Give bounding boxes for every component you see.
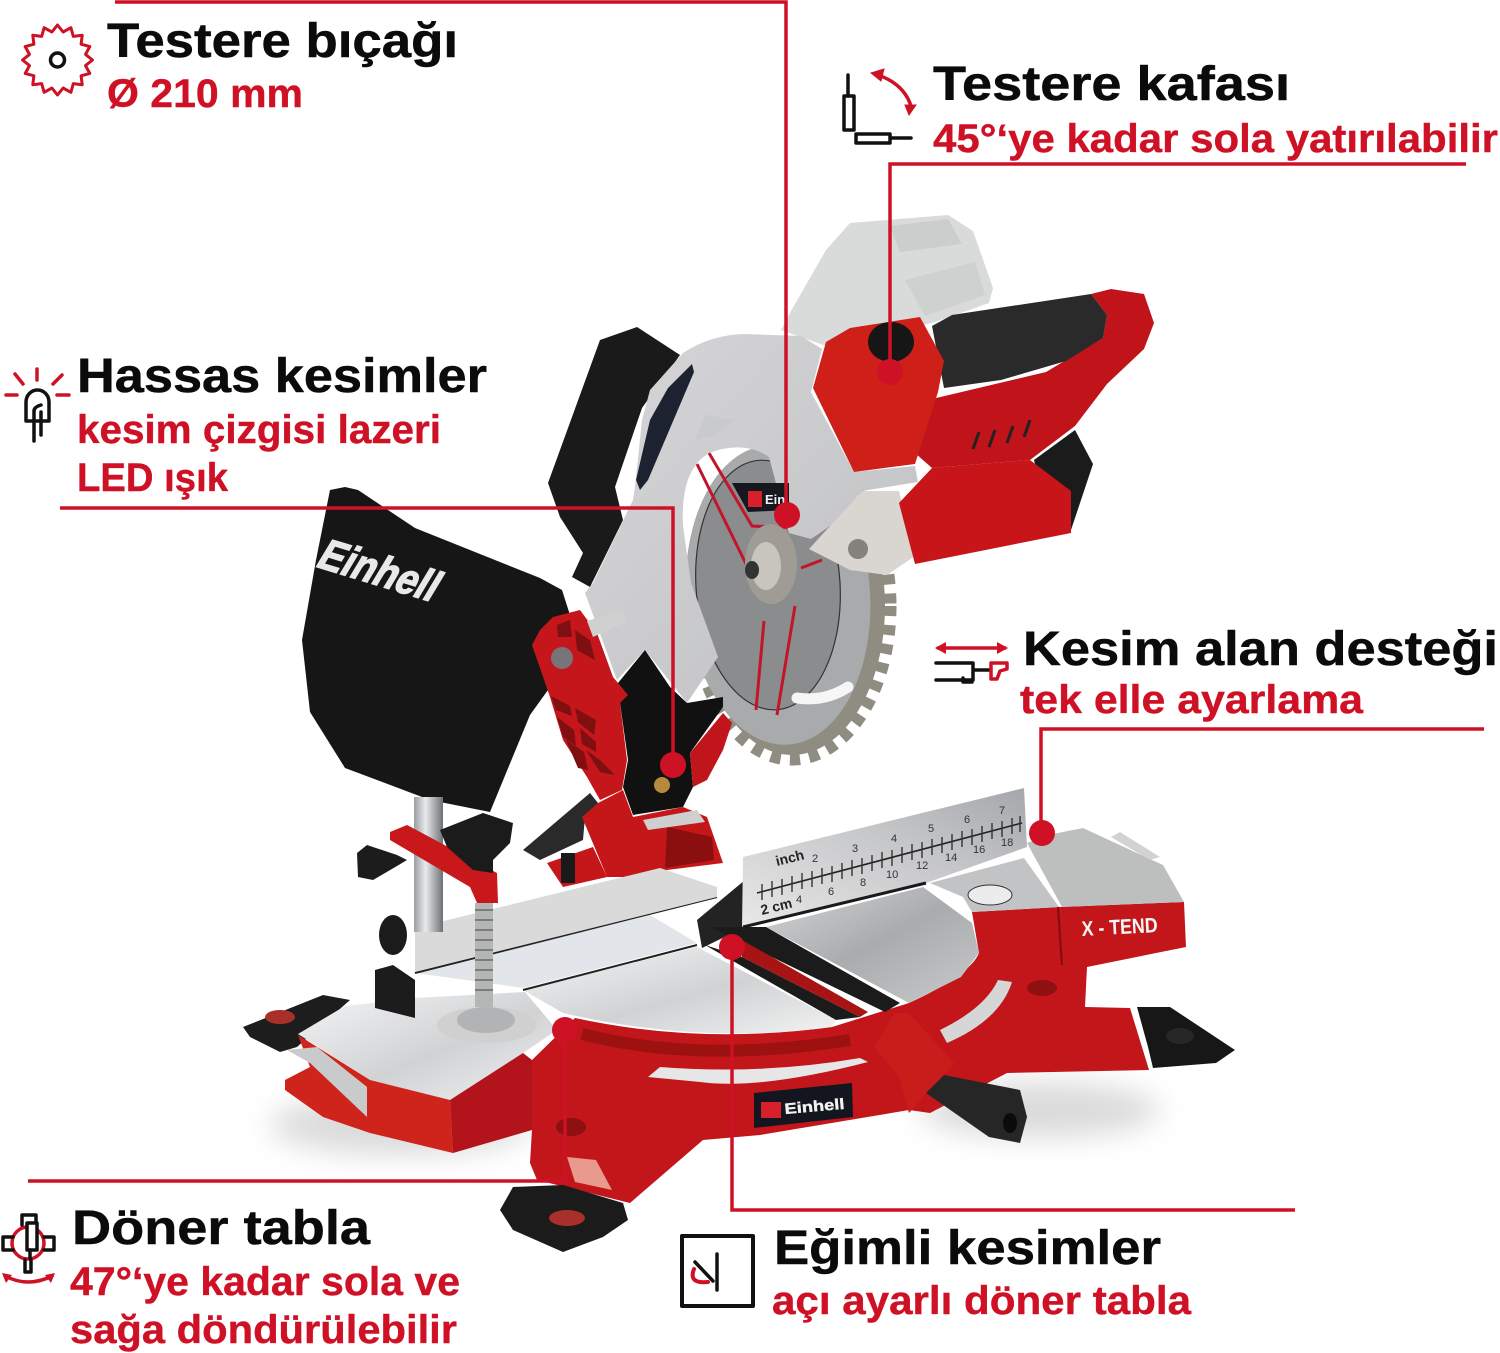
head black grip [932,294,1107,388]
soft floor shadows [270,1082,1160,1155]
ruler labels: 8 [860,877,866,889]
heading: support: tek elle ayarlama [1020,678,1364,722]
base red frame [243,902,1235,1252]
right extension [930,828,1184,965]
angle lock lever [874,1013,954,1113]
heading: turntable: 47°‘ye kadar sola ve [70,1260,460,1304]
red pivot casting [532,610,670,800]
heading: turntable: Döner tabla [72,1202,370,1255]
leader line: support [1029,729,1484,846]
icon: bevel [682,1236,753,1306]
icon: saw blade [22,25,92,95]
leader line: bevel cuts [719,934,1295,1210]
black motor mount [618,650,723,815]
heading: bevel: Eğimli kesimler [774,1222,1161,1275]
arbor flange [745,524,797,604]
ruler labels: 4 [891,833,897,845]
blade [676,439,889,758]
ruler labels: 7 [999,805,1005,817]
black hub and cross bars [697,880,900,1020]
ghost battery [781,215,993,346]
heading: blade: Ø 210 mm [107,72,303,116]
ruler labels: inch [774,846,806,869]
heading: bevel: açı ayarlı döner tabla [772,1279,1192,1323]
heading: saw head: 45°‘ye kadar sola yatırılabilir [933,117,1498,161]
heading: blade [107,15,458,116]
heading: blade: Testere bıçağı [107,15,458,68]
heading: support: Kesim alan desteği [1023,623,1498,676]
brand on bag: Einhell [309,532,451,610]
work clamp [357,797,537,1043]
heading: saw head: Testere kafası [933,58,1290,111]
left extension [285,992,557,1153]
icon: turntable [2,1215,55,1283]
ruler labels: 16 [973,844,985,856]
leader line: saw head [877,164,1466,385]
heading: support [1020,623,1498,722]
Einhell base label [754,1083,853,1128]
motor rear black [1034,430,1093,530]
right extension: X - TEND [1081,914,1158,941]
blade logo: Ein [765,492,785,507]
heading: bevel [772,1222,1192,1323]
icon: LED [6,369,69,441]
black D handle [548,327,680,587]
ruler labels: 14 [945,852,957,864]
rotating table [415,887,979,1033]
red sliver of arm [690,713,732,787]
rear red body [915,289,1154,468]
dust bag [302,487,578,812]
ruler labels: 2 [812,853,818,865]
heading: turntable [70,1202,460,1352]
mitre scales [648,980,1012,1084]
icon: support [935,642,1008,682]
clear blade cover [809,491,915,575]
ruler labels: 6 [828,886,834,898]
heading: precise cuts: Hassas kesimler [77,350,487,403]
ruler labels: 3 [852,843,858,855]
heading: precise cuts [77,350,487,500]
ruler labels: 18 [1001,837,1013,849]
leader line: turntable [28,1017,578,1181]
heading: turntable: sağa döndürülebilir [70,1308,457,1352]
leader line: precise cuts [60,508,686,778]
pivot base wedge [523,793,598,860]
left fence [415,868,717,972]
motor cylinder [899,460,1071,564]
heading: saw head [933,58,1498,161]
feet [243,995,350,1052]
Einhell base label: Einhell [784,1096,845,1118]
product photo: mitre saw [243,215,1235,1252]
right fence ruler [742,788,1027,927]
pivot pedestal [547,790,723,887]
table lock handle [926,1075,1027,1143]
ruler labels: 4 [796,894,802,906]
heading: precise cuts: LED ışık [77,456,229,500]
icon: tilting head [844,69,916,143]
heading: precise cuts: kesim çizgisi lazeri [77,408,441,452]
ruler labels: 2 cm [759,895,794,918]
blade guard [585,334,918,703]
ruler labels [759,805,1013,918]
ruler labels: 12 [916,860,928,872]
ruler labels: 5 [928,823,934,835]
ruler labels: 6 [964,814,970,826]
leader line: blade [115,2,800,528]
head red block [813,317,944,472]
ruler labels: 10 [886,869,898,881]
blade logo [732,483,789,512]
